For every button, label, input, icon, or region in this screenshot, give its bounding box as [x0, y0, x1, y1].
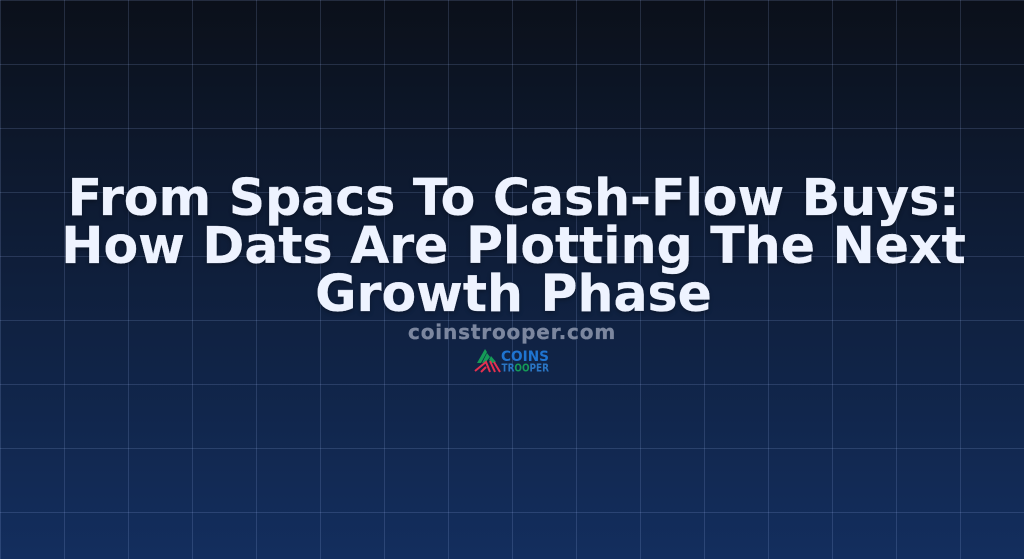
wordmark: COINS: COINS: [501, 349, 549, 365]
title: [61, 168, 966, 323]
icon: green rising peaks: [477, 349, 496, 363]
logo: Coins Trooper: [474, 349, 549, 374]
source website: coinstrooper.com: [408, 320, 616, 344]
title: Growth Phase: [315, 264, 712, 323]
title: From Spacs To Cash-Flow Buys:: [68, 168, 959, 227]
title: How Dats Are Plotting The Next: [61, 216, 966, 275]
icon: red falling stripes: [475, 361, 500, 372]
